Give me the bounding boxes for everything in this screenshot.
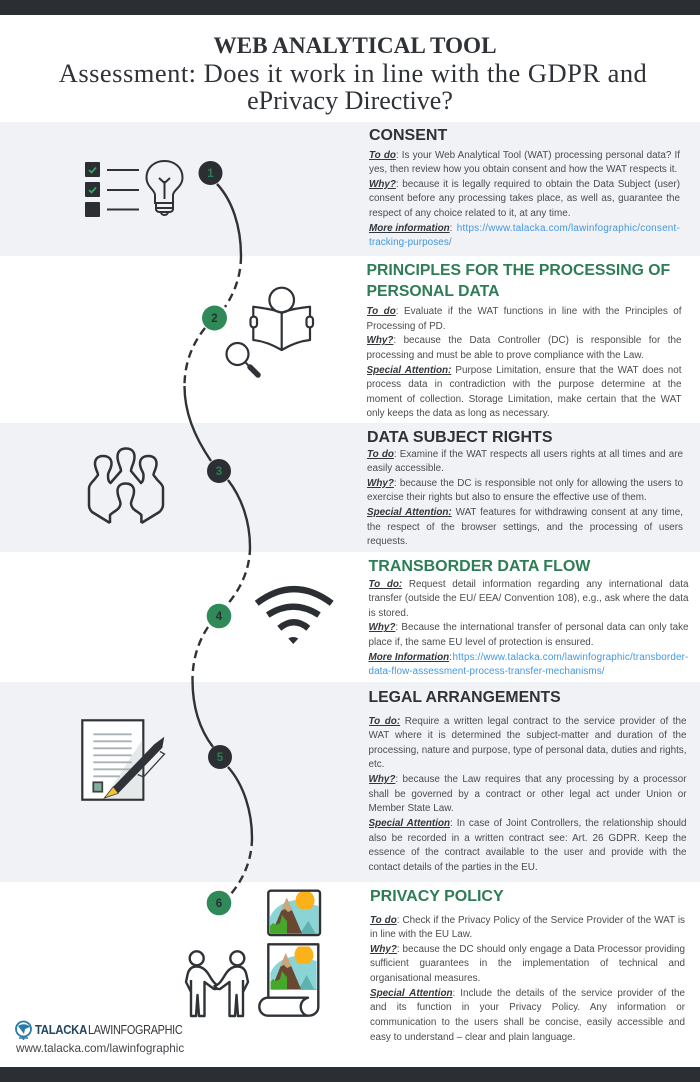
text: data subject rights: exercise their rights but also to ensure the effective use of them. <box>367 492 647 503</box>
text: transborder: To do: Request detail information regarding any international data <box>368 578 688 590</box>
text: privacy policy: communication to the users shall be concise, easily accessible and <box>370 1017 685 1028</box>
text: transborder: is stored. <box>368 608 409 619</box>
text: transborder: https://www.talacka.com/lawinfographic/transborder- <box>453 652 688 663</box>
icon: light bulb <box>146 161 182 215</box>
bottom bar <box>0 1067 700 1082</box>
step 3: 3 <box>216 466 222 478</box>
text: principles: processing and must be able to prove compliance with the Law. <box>366 350 644 361</box>
logo text <box>16 1022 184 1055</box>
text: transborder: data-flow-assessment-process-transfer-mechanisms/ <box>368 666 605 677</box>
text: privacy policy: organisational measures. <box>370 973 480 984</box>
logo text: LAWINFOGRAPHIC <box>88 1023 182 1037</box>
heading: transborder: TRANSBORDER DATA FLOW <box>368 558 590 575</box>
text: privacy policy: To do: Check if the Privacy Policy of the Service Provider of the WAT is <box>370 914 685 926</box>
text: legal arrangements: WAT where it is determined the subject-matter and duration of the <box>368 730 686 741</box>
icon: handshake <box>186 951 248 1016</box>
icon: group of people <box>89 448 163 523</box>
text: legal arrangements: Why?: because the Law requires that any processing by a processor <box>368 774 686 785</box>
text: legal arrangements <box>368 716 686 873</box>
text: principles: Special Attention: Purpose Limitation, ensure that the WAT does not <box>366 364 682 376</box>
step 6: 6 <box>216 898 222 910</box>
step 2 <box>202 306 227 330</box>
icon: checklist <box>85 162 139 217</box>
text: consent <box>369 150 680 248</box>
heading: privacy policy: PRIVACY POLICY <box>370 888 504 905</box>
title: Assessment: Does it work in line with the GDPR and <box>59 58 647 88</box>
step 1 <box>198 161 222 185</box>
panel: consent <box>0 122 700 256</box>
text: data subject rights: requests. <box>367 536 408 547</box>
logo text: www.talacka.com/lawinfographic <box>16 1042 184 1055</box>
text: privacy policy: easy to understand – clear and plain language. <box>370 1032 575 1042</box>
text: data subject rights: Why?: because the DC is responsible not only for allowing the users to <box>367 478 683 489</box>
title: ePrivacy Directive? <box>247 86 453 115</box>
step 6 <box>207 891 231 915</box>
icon: magnifying glass <box>226 343 258 375</box>
text: transborder: More Information: <box>368 652 452 663</box>
heading: principles: PERSONAL DATA <box>366 283 500 300</box>
text: principles: Why?: because the Data Controller (DC) is responsible for the <box>366 335 682 346</box>
heading: principles: PRINCIPLES FOR THE PROCESSING OF <box>366 262 670 279</box>
logo text: TALACKA <box>35 1022 87 1037</box>
text: principles: moment of collection. Storage Limitation, make certain that the WAT <box>366 394 682 405</box>
text: legal arrangements: also be recorded in a written contract see: Art. 26 GDPR. Keep the <box>368 832 686 844</box>
text: data subject rights: easily accessible. <box>367 463 444 474</box>
text: privacy policy: sufficient guarantees in the implementation of technical and <box>370 958 685 969</box>
text: consent: tracking-purposes/ <box>369 237 452 248</box>
text: consent: https://www.talacka.com/lawinfographic/consent- <box>457 223 680 234</box>
text: privacy policy: in line with the EU Law. <box>370 929 472 940</box>
panel: legal arrangements <box>0 682 700 882</box>
icon: logo globe <box>16 1022 31 1040</box>
text: principles <box>366 306 682 419</box>
panel: transborder data flow <box>368 558 688 677</box>
text: privacy policy <box>370 914 685 1042</box>
step 5: 5 <box>217 752 224 764</box>
text: privacy policy: Why?: because the DC should only engage a Data Processor providing <box>370 944 685 955</box>
panel: principles <box>366 262 682 419</box>
text: transborder <box>368 578 688 677</box>
step 5 <box>208 745 232 769</box>
text: principles: process data in contradiction with the purpose determine at the <box>366 379 682 390</box>
icon: wifi signal <box>257 589 332 644</box>
heading: legal arrangements: LEGAL ARRANGEMENTS <box>368 689 561 706</box>
title: WEB ANALYTICAL TOOL <box>213 33 497 59</box>
title <box>59 33 647 115</box>
icon: person reading book <box>250 288 313 350</box>
text: consent: respect of any choice related to it, at any time. <box>369 208 570 219</box>
text: consent: consent before any processing takes place, as well as, guarantee the <box>369 193 680 204</box>
heading: consent: CONSENT <box>369 127 447 144</box>
text: principles: Processing of PD. <box>366 321 446 332</box>
text: legal arrangements: essence of the contract available to the user and provide with the <box>368 847 686 858</box>
text: principles: only keeps the data as long as necessary. <box>366 408 550 419</box>
step 2: 2 <box>211 313 218 325</box>
icon: framed landscape picture <box>268 891 320 935</box>
panel: privacy policy <box>370 888 685 1042</box>
text: consent: To do: Is your Web Analytical Tool (WAT) processing personal data? If <box>369 150 680 160</box>
text: data subject rights: To do: Examine if the WAT respects all users rights at all times and are <box>367 448 683 460</box>
heading: principles <box>366 262 670 300</box>
text: legal arrangements: Member State Law. <box>368 803 454 814</box>
text: legal arrangements: shall be governed by a contract or other legal act under Union or <box>368 789 686 800</box>
heading: data subject rights: DATA SUBJECT RIGHTS <box>367 429 552 446</box>
icon: signed contract with pen <box>82 720 164 800</box>
text: transborder: place if, the same EU level of protection is ensured. <box>368 637 594 648</box>
text: transborder: transfer (outside the EU/ EEA/ Convention 108), e.g., ask where the data <box>368 593 688 604</box>
panel: data subject rights <box>0 423 700 552</box>
text: consent: More information: <box>369 223 452 234</box>
text: consent: yes, then review how you obtain consent and how the WAT respects it. <box>369 164 677 175</box>
timeline: winding path with numbered steps <box>184 161 252 915</box>
text: principles: To do: Evaluate if the WAT functions in line with the Principles of <box>366 306 682 317</box>
step 4 <box>207 604 231 628</box>
text: legal arrangements: Special Attention: In case of Joint Controllers, the relationship should <box>368 818 686 829</box>
text: data subject rights: Special Attention: WAT features for withdrawing consent at any time, <box>367 507 683 518</box>
text: privacy policy: and its function in your Privacy Policy. Any information or <box>370 1002 685 1013</box>
icon: document scroll with picture <box>259 944 318 1016</box>
step 4: 4 <box>216 611 223 623</box>
step 1: 1 <box>207 168 214 180</box>
text: data subject rights: the respect of the browser settings, and the processing of users <box>367 522 683 533</box>
text: legal arrangements: processing, nature and purpose, type of personal data, duties and rights, <box>368 745 686 756</box>
text: legal arrangements: contact details of the parties in the EU. <box>368 862 538 873</box>
text: legal arrangements: etc. <box>368 759 384 770</box>
text: consent: Why?: because it is legally required to obtain the Data Subject (user) <box>369 179 680 190</box>
top bar <box>0 0 700 15</box>
text: legal arrangements: To do: Require a written legal contract to the service provider of the <box>368 716 686 726</box>
text: transborder: Why?: Because the international transfer of personal data can only take <box>368 622 688 633</box>
step 3 <box>207 459 231 483</box>
text: data subject rights <box>367 448 683 547</box>
